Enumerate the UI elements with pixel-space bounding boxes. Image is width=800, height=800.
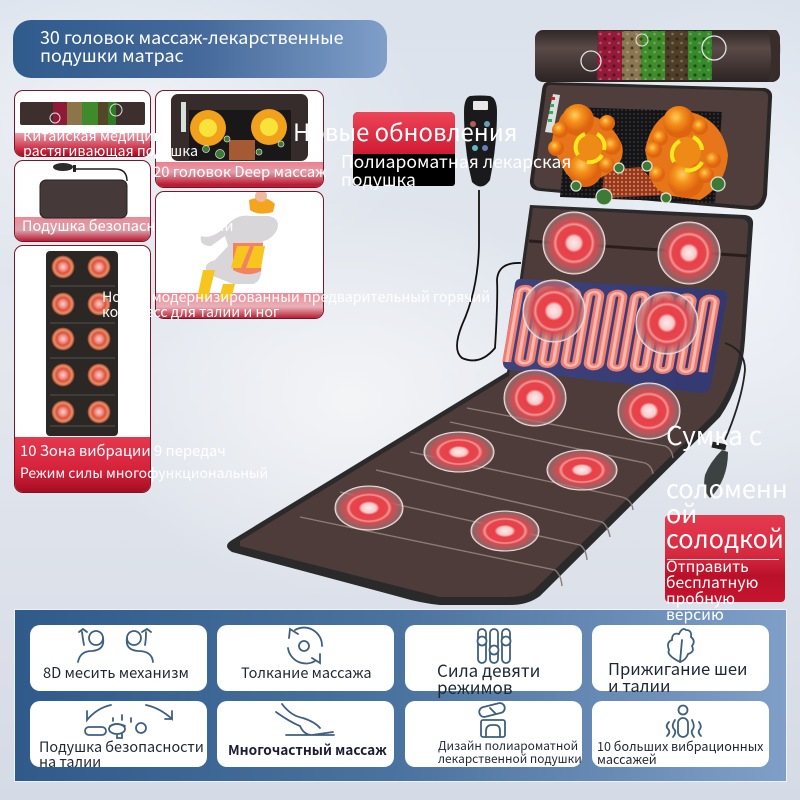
title text: 30 головок массаж-лекарственные [40, 24, 344, 50]
left massage head [548, 104, 623, 187]
text: free trial: Отправить [666, 555, 749, 577]
caption: hot compress: компресс для талии и ног [102, 302, 279, 322]
feature card: nine modes [405, 625, 582, 691]
mini mat illustration [46, 251, 118, 436]
text: herbal bag name: соломенн [666, 470, 788, 506]
card: hot compress [155, 191, 324, 319]
label: herbal pillow design: лекарственной подушки [438, 750, 582, 766]
text: herbal bag name: солодкой [666, 520, 784, 556]
mesh panel [560, 107, 722, 203]
text: herbal bag name [666, 470, 788, 556]
icon: pills and pillow [478, 702, 506, 737]
caption: vibration zone [20, 440, 268, 483]
caption: herbal pillow: растягивающая подушка [23, 140, 198, 161]
title text: подушки матрас [40, 42, 184, 68]
caption: 20 heads: 20 головок Deep массаж [153, 161, 326, 182]
label: waist airbag: Подушка безопасности [39, 736, 204, 757]
heating pad [503, 279, 727, 393]
label: 8D: 8D месить механизм [43, 662, 189, 683]
herbal pillow [535, 30, 780, 82]
red caption band [156, 293, 323, 318]
text: herbal pillow [341, 149, 571, 192]
caption: hot compress: Новый модернизированный предварительный горячий [102, 287, 490, 307]
text: herbal bag heading: Сумка с [666, 416, 762, 453]
mat body [227, 205, 753, 605]
title banner [13, 20, 387, 78]
feature card: waist airbag [30, 701, 207, 767]
caption: airbag: Подушка безопасности талии [22, 215, 234, 236]
card: 10 zone vibration [14, 245, 151, 493]
text: herbal pillow: Полиароматная лекарская [341, 149, 571, 174]
remote cable [457, 190, 521, 360]
icon: wormwood leaf [668, 629, 694, 662]
icon: sliders [478, 629, 510, 663]
head section [530, 82, 772, 210]
new update badge [353, 112, 455, 186]
herb capsules [571, 161, 725, 205]
label: moxibustion [608, 656, 748, 697]
heated coil [602, 167, 668, 198]
text: free trial: версию [666, 603, 724, 625]
icon: massaging hand [276, 704, 334, 735]
text: free trial: пробную [666, 587, 735, 609]
red caption band [15, 133, 150, 156]
vibration hot spots [335, 212, 720, 551]
label: nine modes: режимов [437, 674, 512, 699]
icon: kneading [78, 629, 153, 662]
feature card: moxibustion [592, 625, 769, 691]
text: herbal pillow: подушка [341, 167, 416, 192]
caption: herbal pillow [23, 125, 198, 161]
mat stripes [300, 408, 673, 586]
remote control [464, 96, 497, 187]
caption: hot compress [102, 287, 490, 322]
label: multi-part: Многочастный массаж [228, 739, 387, 759]
red caption band [156, 162, 323, 187]
right massage head [645, 106, 728, 200]
red caption band [15, 437, 150, 492]
label: vibration [597, 736, 764, 768]
heading: new updates: Новые обновления [293, 113, 517, 148]
feature card: vibration [592, 701, 769, 767]
head cushion illustration [171, 94, 308, 161]
label: nine modes: Сила девяти [437, 657, 540, 682]
title text [40, 24, 344, 68]
text: free trial [666, 555, 758, 625]
text: free trial: бесплатную [666, 571, 758, 593]
feature card: herbal pillow [405, 701, 582, 767]
feature panel [15, 610, 786, 781]
card: deep massage [155, 90, 324, 188]
label: moxibustion: и талии [608, 673, 670, 697]
label: vibration: массажей [597, 749, 657, 768]
feature card: 8D [30, 625, 207, 691]
icon: rotation [288, 628, 322, 664]
seated figure illustration [198, 192, 278, 299]
icon: waist airbag [85, 705, 172, 738]
airbag illustration [40, 163, 128, 218]
card: waist airbag [14, 160, 151, 242]
red caption band [15, 217, 150, 241]
feature card: multi-part [217, 701, 394, 767]
pillow illustration [20, 102, 145, 125]
control strip [545, 94, 560, 133]
label: pushing: Толкание массажа [241, 662, 372, 683]
label: herbal pillow design: Дизайн полиароматной [438, 737, 578, 754]
air hose and bulb [704, 343, 745, 498]
label: nine modes [437, 657, 540, 699]
feature card: push [217, 625, 394, 691]
free trial badge [665, 515, 785, 602]
icon: vibrating body [667, 706, 701, 737]
caption: vibration zone: 10 Зона вибрации 9 передач [20, 440, 226, 461]
label: waist airbag: на талии [39, 751, 101, 772]
text: herbal bag name: ой [666, 495, 697, 531]
label: waist airbag [39, 736, 204, 772]
label: moxibustion: Прижигание шеи [608, 656, 748, 680]
badge divider [667, 559, 779, 560]
caption: vibration zone: Режим силы многофункциональный [20, 463, 268, 483]
caption: herbal pillow: Китайская медицина [23, 125, 170, 146]
label: herbal pillow design [438, 737, 582, 766]
label: vibration: 10 больших вибрационных [597, 736, 763, 755]
card: herbal pillow [14, 90, 151, 157]
red badge top [353, 112, 455, 154]
